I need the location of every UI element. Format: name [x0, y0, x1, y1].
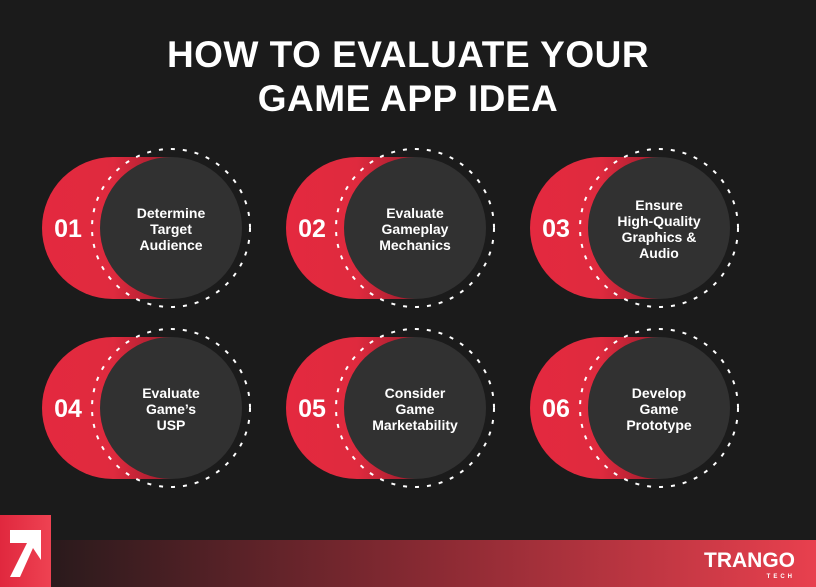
title: GAME APP IDEA [258, 78, 558, 119]
card 01: Target [150, 221, 192, 237]
card 03 [530, 149, 738, 307]
card 06: Develop [632, 385, 686, 401]
title: HOW TO EVALUATE YOUR [167, 34, 649, 75]
card 03: Graphics & [622, 229, 696, 245]
card 04: USP [157, 417, 185, 433]
card 04: Game’s [146, 401, 196, 417]
card 01 [42, 149, 250, 307]
brand logo text: TRANGO [704, 549, 795, 572]
card 03: Ensure [635, 197, 683, 213]
logo square [0, 515, 51, 587]
footer bar [51, 540, 816, 587]
card 04 [42, 329, 250, 487]
card 06: Game [640, 401, 679, 417]
card 01: Audience [139, 237, 203, 253]
card 03: 03 [542, 215, 570, 243]
card 05 [286, 329, 494, 487]
brand logo text: TECH [767, 574, 795, 580]
card 05: Consider [385, 385, 446, 401]
card 02: 02 [298, 215, 326, 243]
card 02 [286, 149, 494, 307]
card 05: Game [396, 401, 435, 417]
card 02: Gameplay [382, 221, 449, 237]
card 06: 06 [542, 395, 570, 423]
card 06 [530, 329, 738, 487]
card 03: Audio [639, 245, 679, 261]
card 03: High-Quality [617, 213, 701, 229]
title [167, 34, 649, 119]
card 01: Determine [137, 205, 205, 221]
card 06: Prototype [626, 417, 692, 433]
card 02: Mechanics [379, 237, 451, 253]
card 05: 05 [298, 395, 326, 423]
card 02: Evaluate [386, 205, 444, 221]
card 01: 01 [54, 215, 82, 243]
card 04: 04 [54, 395, 82, 423]
card 04: Evaluate [142, 385, 200, 401]
card 05: Marketability [372, 417, 458, 433]
